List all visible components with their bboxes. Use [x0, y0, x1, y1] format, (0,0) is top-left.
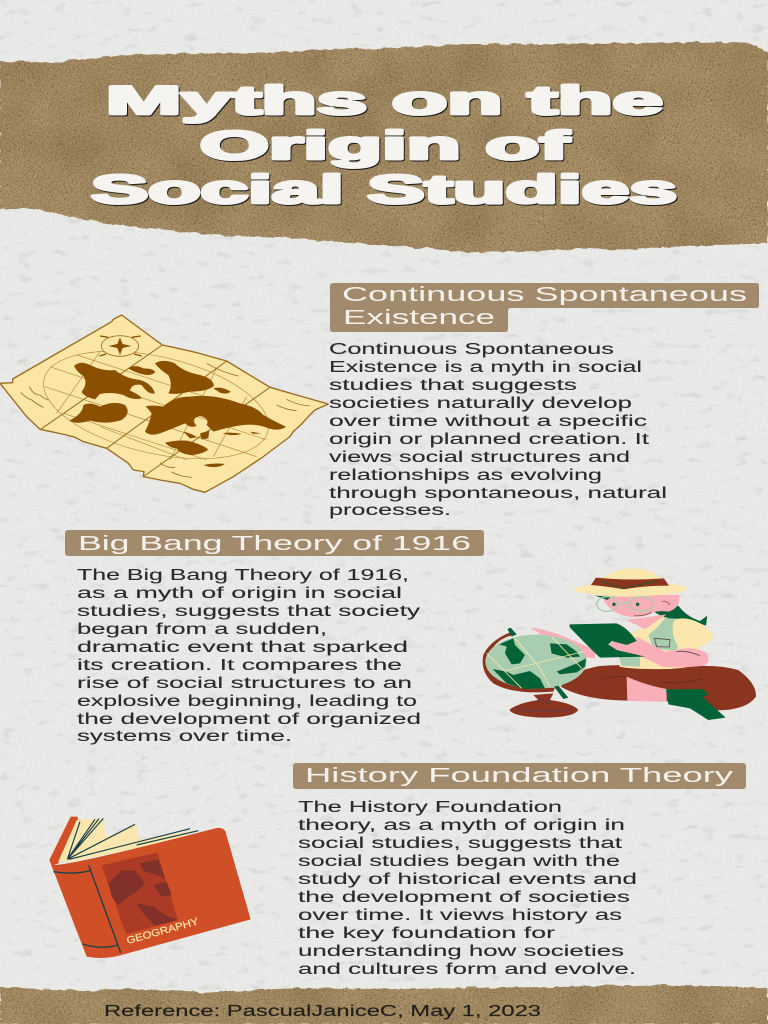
body text: Continuous Spontaneous Existence: studies that suggests [329, 377, 577, 394]
body text: Big Bang Theory of 1916: rise of social structures to an [77, 675, 412, 692]
body text: Big Bang Theory of 1916: studies, suggests that society [77, 603, 420, 620]
heading: Big Bang Theory of 1916: Big Bang Theory of 1916 [78, 532, 471, 555]
body text: History Foundation Theory: The History Foundation [298, 799, 562, 816]
icon: treasure map [0, 315, 328, 492]
body text: Continuous Spontaneous Existence: over time without a specific [329, 413, 647, 430]
icon: geography book [49, 817, 251, 958]
body text: History Foundation Theory: theory, as a myth of origin in [298, 817, 625, 834]
body text: Continuous Spontaneous Existence: societies naturally develop [329, 395, 632, 412]
tablet [569, 623, 645, 658]
torso [619, 615, 703, 669]
hair [653, 606, 707, 626]
body text: Continuous Spontaneous Existence: Continuous Spontaneous [329, 341, 614, 358]
heading: Continuous Spontaneous Existence: Existence [343, 306, 495, 329]
body text: Big Bang Theory of 1916: The Big Bang Theory of 1916, [77, 567, 409, 584]
footer: torn kraft paper strip [0, 980, 768, 1024]
body text: Continuous Spontaneous Existence: through spontaneous, natural [329, 485, 667, 502]
head [602, 595, 679, 617]
body text: Continuous Spontaneous Existence: processes. [329, 502, 451, 519]
body text: History Foundation Theory: and cultures form and evolve. [298, 961, 636, 978]
body text: History Foundation Theory: social studies, suggests that [298, 835, 623, 852]
body text: Continuous Spontaneous Existence: origin or planned creation. It [329, 431, 650, 448]
heading: Big Bang Theory of 1916 [65, 530, 484, 556]
body text: Continuous Spontaneous Existence: views social structures and [329, 449, 630, 466]
title [91, 79, 677, 212]
reference note: Reference: PascualJaniceC, May 1, 2023 [104, 1003, 541, 1020]
body text: Big Bang Theory of 1916 [77, 567, 421, 745]
far arm reaching to globe [531, 628, 595, 658]
heading: History Foundation Theory [293, 763, 746, 789]
icon: explorer with globe [483, 568, 756, 720]
body text: Big Bang Theory of 1916: as a myth of origin in social [77, 585, 402, 602]
hat [572, 568, 688, 597]
near arm [608, 638, 708, 667]
sleeve [673, 618, 714, 647]
body text: History Foundation Theory: the key foundation for [298, 925, 555, 942]
body text: Continuous Spontaneous Existence [329, 341, 667, 519]
body text: Continuous Spontaneous Existence: Existence is a myth in social [329, 359, 642, 376]
legs [561, 665, 756, 710]
body text: History Foundation Theory: study of historical events and [298, 871, 637, 888]
body text: Big Bang Theory of 1916: the development of organized [77, 711, 421, 728]
body text: Big Bang Theory of 1916: began from a sudden, [77, 621, 327, 638]
header: torn kraft paper banner [0, 36, 768, 260]
body text: History Foundation Theory: the development of societies [298, 889, 630, 906]
body text: History Foundation Theory: social studies began with the [298, 853, 620, 870]
section: Big Bang Theory of 1916 [65, 530, 484, 745]
body text: History Foundation Theory: understanding how societies [298, 943, 624, 960]
body text: Big Bang Theory of 1916: dramatic event that sparked [77, 639, 408, 656]
body text: Continuous Spontaneous Existence: relationships as evolving [329, 467, 602, 484]
globe [483, 631, 555, 692]
heading: Continuous Spontaneous Existence [330, 283, 759, 332]
section: Continuous Spontaneous Existence [329, 283, 759, 519]
body text: Big Bang Theory of 1916: its creation. It compares the [77, 657, 402, 674]
body text: History Foundation Theory [298, 799, 637, 978]
icon: geography book: GEOGRAPHY [126, 916, 200, 947]
heading: Continuous Spontaneous Existence: Continuous Spontaneous [342, 283, 747, 306]
body text: Big Bang Theory of 1916: systems over time. [77, 728, 292, 745]
heading: History Foundation Theory: History Foundation Theory [305, 764, 734, 787]
neck [627, 614, 667, 629]
body text: History Foundation Theory: over time. It views history as [298, 907, 622, 924]
title: Myths on the [106, 79, 663, 123]
body text: Big Bang Theory of 1916: explosive beginning, leading to [77, 693, 417, 710]
title: Origin of [200, 124, 571, 168]
section: History Foundation Theory [293, 763, 746, 978]
title: Social Studies [91, 168, 677, 212]
